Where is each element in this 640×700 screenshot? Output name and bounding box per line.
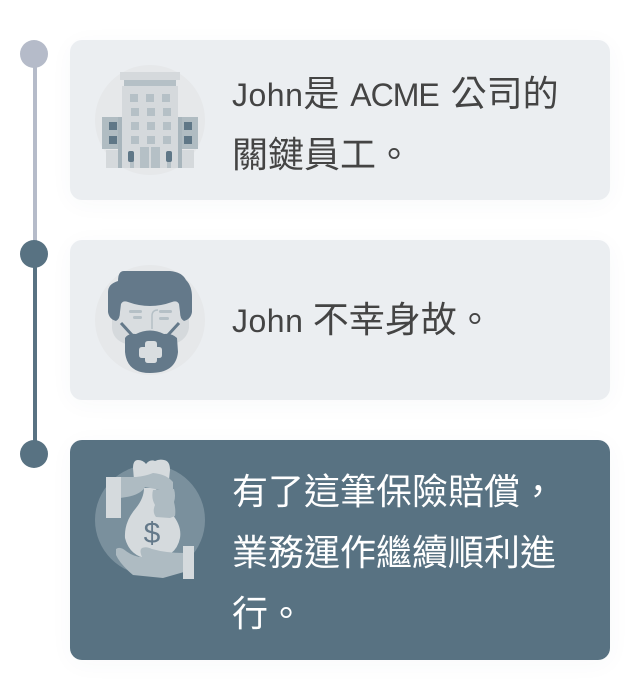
text: card 1: 關鍵員工。	[232, 134, 412, 175]
timeline dot 1	[20, 40, 48, 68]
text: card 3	[232, 471, 556, 634]
panel: card 3 background	[70, 440, 610, 660]
icon: office building	[102, 72, 198, 168]
dollar sign: $	[144, 517, 161, 550]
panel: card 1 background	[70, 40, 610, 200]
text: card 3: 行。	[232, 593, 304, 634]
text: card 2: John 不幸身故。	[232, 299, 493, 340]
timeline dot 3	[20, 440, 48, 468]
timeline line: second segment	[33, 254, 37, 454]
icon: hands passing money bag	[95, 460, 205, 579]
text: card 1	[232, 73, 559, 175]
text: card 3: 業務運作繼續順利進	[232, 532, 556, 573]
panel: card 2 background	[70, 240, 610, 400]
timeline dot 2	[20, 240, 48, 268]
icon: man with medical mask	[108, 271, 192, 373]
text: card 3: 有了這筆保險賠償，	[232, 471, 556, 512]
text: card 1: John是 ACME 公司的	[232, 73, 559, 114]
timeline line: first segment	[33, 54, 37, 254]
